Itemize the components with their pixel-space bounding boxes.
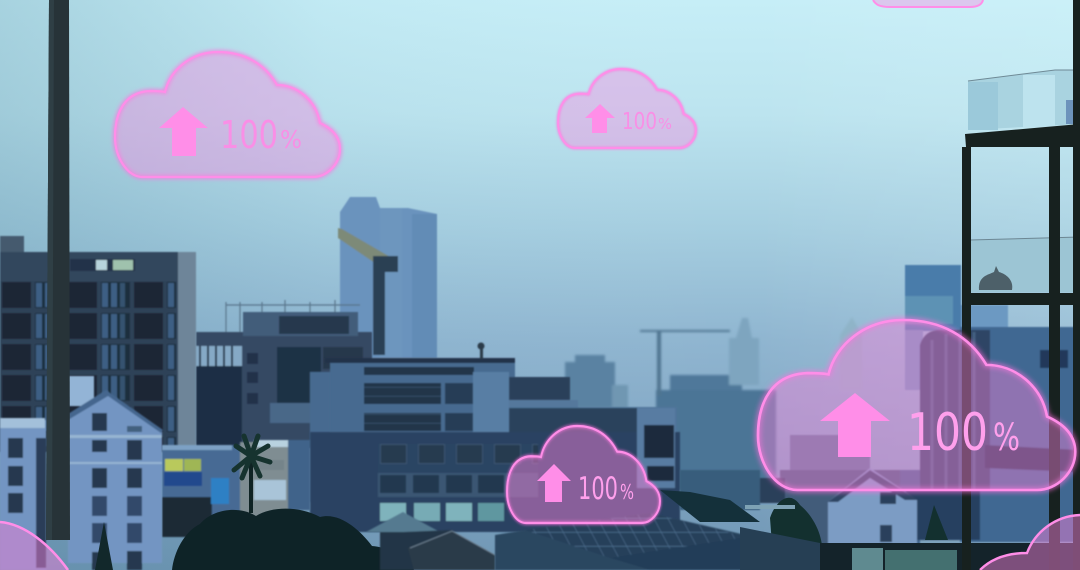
central office block [310,342,680,532]
cloud upload icon: bottom right, cropped [980,515,1080,570]
small rooftops [366,512,495,570]
cloud upload icon: lower centre: 100 [578,471,618,507]
cloud upload icon: lower centre: % [620,480,634,504]
foreground trees left [95,509,414,570]
mid building under construction [196,300,372,502]
cloud upload icon: top right, cropped [873,0,983,7]
cloud upload icon: lower right, large: % [993,416,1020,459]
cloud upload icon: lower right, large: 100 [907,403,988,463]
steel frame [962,0,1080,570]
glass balustrade upper [968,70,1080,130]
cloud upload icon: top left [115,52,340,177]
street lamp pole [46,0,70,540]
right foreground trees and wall [660,490,1080,570]
far right blue tower [905,265,1008,390]
cloud upload icon: top left: 100 [220,113,278,157]
palm tree [234,436,270,513]
cloud upload icon: bottom left, cropped [0,522,68,570]
tall tower with crane [338,197,437,358]
cloud upload icon: top centre [558,69,696,148]
left apartment block [0,236,196,452]
cloud upload icon: lower centre [507,426,660,523]
cloud upload icon: top centre: 100 [622,109,657,135]
solar panel roof [495,513,820,570]
cloud upload icon: top centre: % [658,115,672,133]
distant hazy skyline [565,317,862,490]
white gabled building [0,376,163,570]
balcony structure [962,0,1080,570]
cloud upload icon: top left: % [280,125,302,154]
cloud upload icon: lower right, large [758,320,1075,490]
right distant buildings behind balcony [680,327,1080,545]
glass balustrade lower [970,237,1080,292]
mid-left low buildings with lit windows [162,440,310,537]
